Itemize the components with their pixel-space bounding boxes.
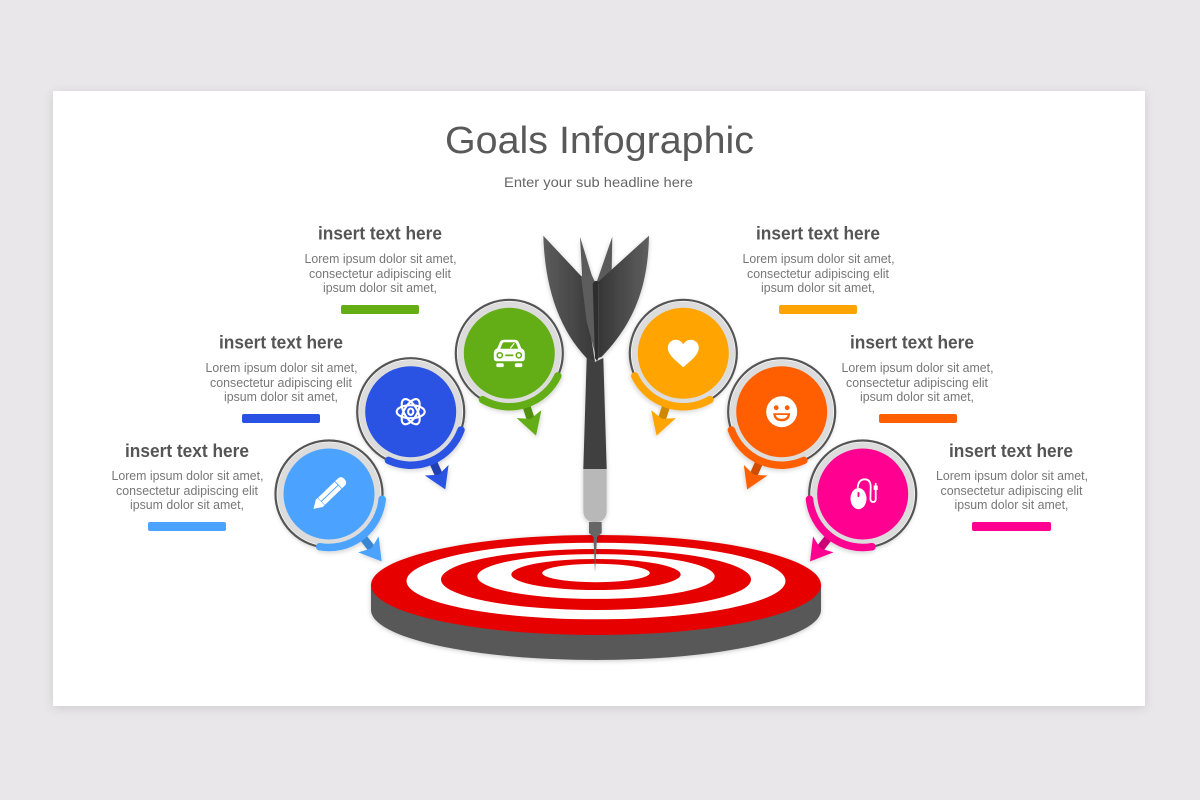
text block: blue: insert text here xyxy=(219,332,343,352)
text block: pink: insert text here xyxy=(949,441,1073,461)
background panel xyxy=(53,91,1145,706)
text block: green: ipsum dolor sit amet, xyxy=(323,281,437,295)
text block: amber: ipsum dolor sit amet, xyxy=(761,281,875,295)
ring and arrow xyxy=(456,300,563,440)
title: Goals Infographic xyxy=(445,120,754,162)
step 1: light blue pencil badge xyxy=(276,440,392,569)
text block: amber: Lorem ipsum dolor sit amet, xyxy=(742,252,894,266)
text block: orange: Lorem ipsum dolor sit amet, xyxy=(842,361,994,375)
text block: orange: consectetur adipiscing elit xyxy=(846,376,989,390)
text block: blue: ipsum dolor sit amet, xyxy=(224,390,338,404)
text block: green xyxy=(304,224,456,314)
text block: blue: consectetur adipiscing elit xyxy=(210,376,353,390)
icon: smile xyxy=(766,396,797,427)
text block: blue: Lorem ipsum dolor sit amet, xyxy=(206,361,358,375)
step 6: pink mouse badge xyxy=(800,440,916,569)
icon: car xyxy=(494,340,525,367)
ring and arrow xyxy=(800,440,916,569)
ring and arrow xyxy=(630,300,737,440)
text block: amber: insert text here xyxy=(756,224,880,244)
text block: pink: consectetur adipiscing elit xyxy=(940,484,1083,498)
ring and arrow xyxy=(357,358,464,495)
step 4: amber heart badge xyxy=(630,300,737,440)
text block: pink xyxy=(936,441,1088,531)
text block: amber xyxy=(742,224,894,314)
icon: pencil xyxy=(310,475,348,513)
text block: orange: insert text here xyxy=(850,332,974,352)
icon: heart xyxy=(668,340,699,367)
text block: light blue: ipsum dolor sit amet, xyxy=(130,498,244,512)
text block: pink: ipsum dolor sit amet, xyxy=(954,498,1068,512)
icon: mouse xyxy=(850,479,878,509)
text block: green: Lorem ipsum dolor sit amet, xyxy=(304,252,456,266)
step 5: orange smile badge xyxy=(728,358,835,495)
text block: light blue: insert text here xyxy=(125,441,249,461)
text block: light blue: consectetur adipiscing elit xyxy=(116,484,259,498)
target board xyxy=(371,535,821,660)
text block: light blue xyxy=(112,441,264,531)
ring and arrow xyxy=(276,440,392,569)
text block: green: insert text here xyxy=(318,224,442,244)
text block: light blue: Lorem ipsum dolor sit amet, xyxy=(112,469,264,483)
icon: atom xyxy=(397,396,425,427)
text block: amber: consectetur adipiscing elit xyxy=(747,267,890,281)
step 2: blue atom badge xyxy=(357,358,464,495)
subtitle: Enter your sub headline here xyxy=(504,174,693,190)
text block: orange xyxy=(842,332,994,423)
text block: blue xyxy=(206,332,358,423)
step 3: green car badge xyxy=(456,300,563,440)
text block: pink: Lorem ipsum dolor sit amet, xyxy=(936,469,1088,483)
text block: orange: ipsum dolor sit amet, xyxy=(860,390,974,404)
ring and arrow xyxy=(728,358,835,495)
dart xyxy=(543,236,649,572)
text block: green: consectetur adipiscing elit xyxy=(309,267,452,281)
